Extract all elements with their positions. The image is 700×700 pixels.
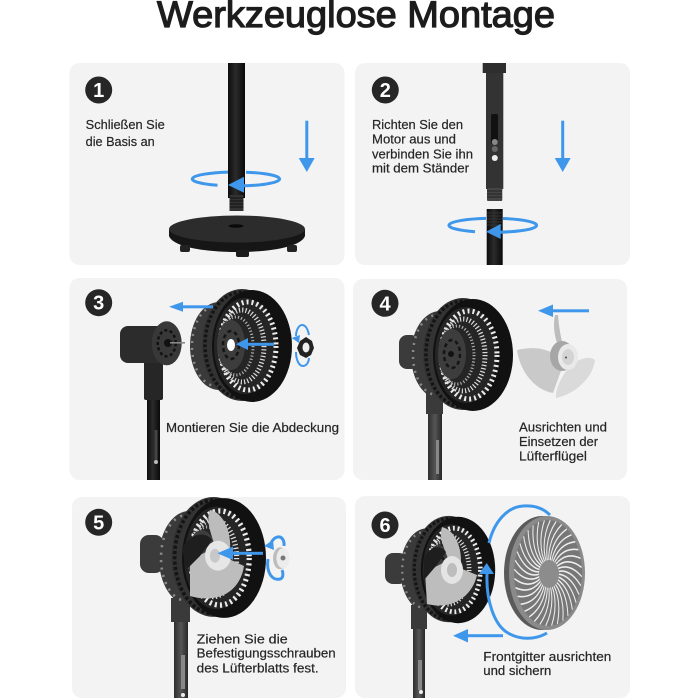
step 5 text: Befestigungsschrauben: [197, 647, 336, 661]
step 1 badge: [85, 76, 112, 104]
big curved arrow top: [489, 506, 550, 543]
step 4 text: Lüfterflügel: [519, 450, 587, 464]
step 4 badge: [372, 290, 398, 317]
step 2 text: Richten Sie den: [372, 118, 463, 132]
fan on stand: [399, 298, 513, 480]
step 2 text: Motor aus und: [372, 133, 456, 147]
step 3 text: Montieren Sie die Abdeckung: [166, 421, 339, 435]
arrow into housing: [236, 338, 274, 350]
step 6 text: [483, 650, 611, 678]
rotation arrow: [192, 172, 280, 193]
step 2 badge: 2: [380, 80, 391, 102]
arrow into hub: [217, 546, 263, 560]
arrow left: [169, 302, 213, 312]
step 6 badge: 6: [379, 515, 391, 537]
step 4 text: Einsetzen der: [519, 435, 598, 449]
panel: step 6: [355, 496, 630, 698]
screw cap: [273, 547, 290, 569]
step 2 text: verbinden Sie ihn: [372, 147, 473, 161]
step 1 text: Schließen Sie: [86, 118, 165, 132]
step 1 text: die Basis an: [86, 135, 155, 149]
arrow left: [453, 629, 503, 642]
panel: step 3: [70, 278, 344, 480]
step 1 text: [86, 118, 165, 149]
step 2 text: mit dem Ständer: [372, 162, 469, 176]
pole: [228, 63, 245, 211]
down arrow: [299, 121, 315, 172]
step 5 badge: [85, 509, 112, 536]
step 5 text: Ziehen Sie die: [197, 632, 288, 646]
step 4 badge: 4: [379, 293, 391, 315]
step 5 text: des Lüfterblatts fest.: [197, 661, 319, 675]
panel: step 1: [70, 63, 344, 265]
upper pole with display: [483, 63, 506, 201]
step 2 text: [372, 118, 473, 176]
step 2 badge: [372, 76, 399, 104]
fan with blades on stand: [385, 516, 495, 698]
panel: step 4: [353, 279, 627, 480]
fan housing: [190, 289, 292, 402]
panel: step 2: [355, 63, 630, 265]
stand base: [169, 216, 305, 257]
step 6 text: Frontgitter ausrichten: [483, 650, 611, 664]
front grille: [504, 516, 585, 630]
step 1 badge: 1: [93, 80, 104, 102]
step 4 text: [519, 420, 607, 464]
step 6 text: und sichern: [483, 664, 551, 678]
rotation arrow: [264, 537, 284, 579]
center hole: [227, 339, 235, 351]
step 3 badge: 3: [93, 293, 104, 315]
lower pole: [487, 209, 503, 265]
rotation arrow: [449, 218, 537, 239]
step 4 text: Ausrichten und: [519, 420, 607, 434]
fan with blades on stand: [140, 497, 266, 698]
down arrow: [555, 121, 571, 172]
step 5 text: [197, 632, 336, 675]
fan blade: [517, 315, 595, 398]
nut: [297, 337, 314, 358]
step 5 badge: 5: [93, 512, 104, 534]
rotation arrow: [292, 325, 309, 366]
step 3 badge: [85, 289, 112, 316]
big curved arrow bottom: [479, 563, 547, 638]
motor on pole: [120, 321, 185, 480]
arrow left: [538, 304, 589, 317]
panel: step 5: [72, 497, 346, 698]
step 6 badge: [372, 512, 398, 538]
